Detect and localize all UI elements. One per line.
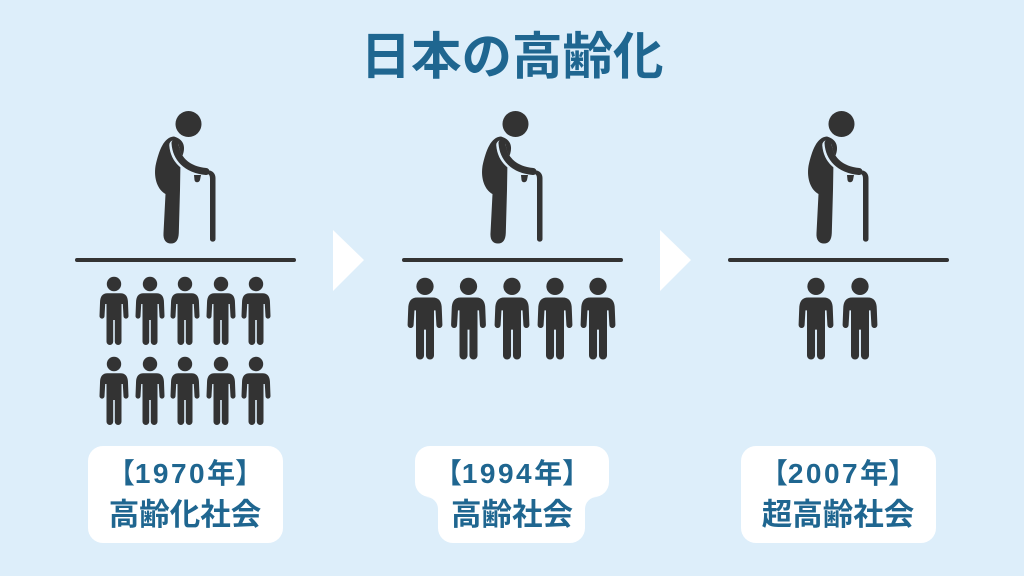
arrow 1: [333, 230, 364, 291]
icon group: ten supporting workers: [99, 277, 271, 425]
panel: 1994: [402, 111, 623, 543]
label card: 1994: 【1994年】: [434, 458, 590, 489]
label card: 1970: 【1970年】: [107, 458, 263, 489]
arrow 2: [660, 230, 691, 291]
label card: 1970: 高齢化社会: [109, 498, 261, 532]
label card: 1994: [415, 446, 609, 543]
label card: 1994: 高齢社会: [451, 498, 573, 532]
label card: 2007: 超高齢社会: [762, 498, 914, 532]
label card: 2007: [741, 446, 936, 543]
divider line 1994: [402, 258, 623, 262]
panel: 2007: [728, 111, 949, 543]
icon: elderly person 2007: [808, 111, 868, 244]
label card: 1970: [88, 446, 283, 543]
divider line 2007: [728, 258, 949, 262]
label card: 2007: 【2007年】: [760, 458, 916, 489]
icon: elderly person 1970: [155, 111, 216, 244]
icon group: five supporting workers: [408, 278, 615, 360]
icon: elderly person 1994: [482, 111, 542, 244]
icon group: two supporting workers: [799, 278, 877, 360]
panel: 1970: [75, 111, 296, 543]
title: 日本の高齢化: [360, 28, 664, 85]
divider line 1970: [75, 258, 296, 262]
